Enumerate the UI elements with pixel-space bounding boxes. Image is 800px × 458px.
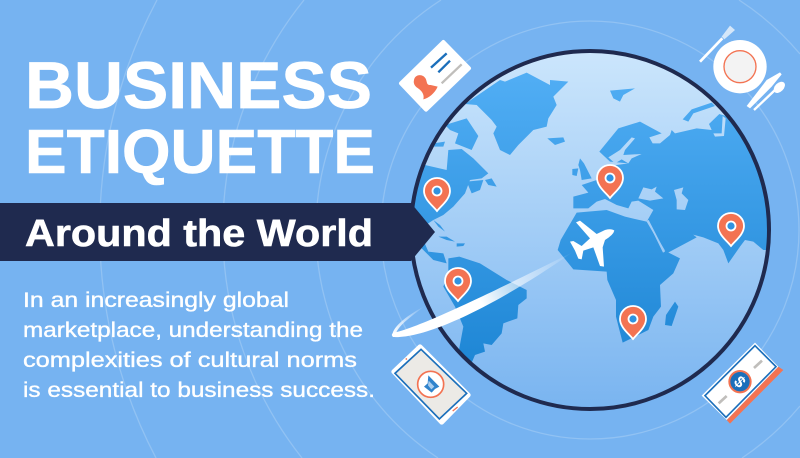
banner text: Around the World <box>25 213 373 255</box>
globe ocean <box>411 51 769 409</box>
Americas, Greenland and Africa <box>390 73 680 367</box>
banner <box>0 203 435 261</box>
body text <box>23 289 375 402</box>
icon: banknote <box>702 343 783 424</box>
fork <box>700 38 722 62</box>
Eurasia <box>572 103 787 263</box>
body text: complexities of cultural norms <box>23 349 357 372</box>
inland seas <box>608 116 726 253</box>
dollar sign: $ <box>730 373 748 392</box>
map pin: South America <box>445 268 471 301</box>
globe outline <box>411 51 769 409</box>
title line: ETIQUETTE: ETIQUETTE <box>25 118 375 187</box>
body text: marketplace, understanding the <box>23 319 363 342</box>
map pin: Asia <box>718 213 744 246</box>
title <box>25 48 375 187</box>
knife <box>747 72 782 108</box>
plate <box>713 40 767 93</box>
icon: airplane <box>570 221 614 267</box>
icon: business card <box>401 42 469 110</box>
banner shape <box>0 203 435 261</box>
continents <box>414 72 767 362</box>
icon: tablet <box>394 347 468 422</box>
body text: In an increasingly global <box>23 289 289 312</box>
body text: is essential to business success. <box>23 379 375 402</box>
globe <box>390 51 787 409</box>
icon: plate and cutlery <box>700 26 787 110</box>
map pin: Europe <box>597 165 623 198</box>
flight trail <box>392 252 573 337</box>
title line: BUSINESS: BUSINESS <box>25 48 372 122</box>
spoon <box>754 90 775 110</box>
map pin: North America <box>424 178 450 211</box>
map pin: Africa <box>620 306 646 339</box>
